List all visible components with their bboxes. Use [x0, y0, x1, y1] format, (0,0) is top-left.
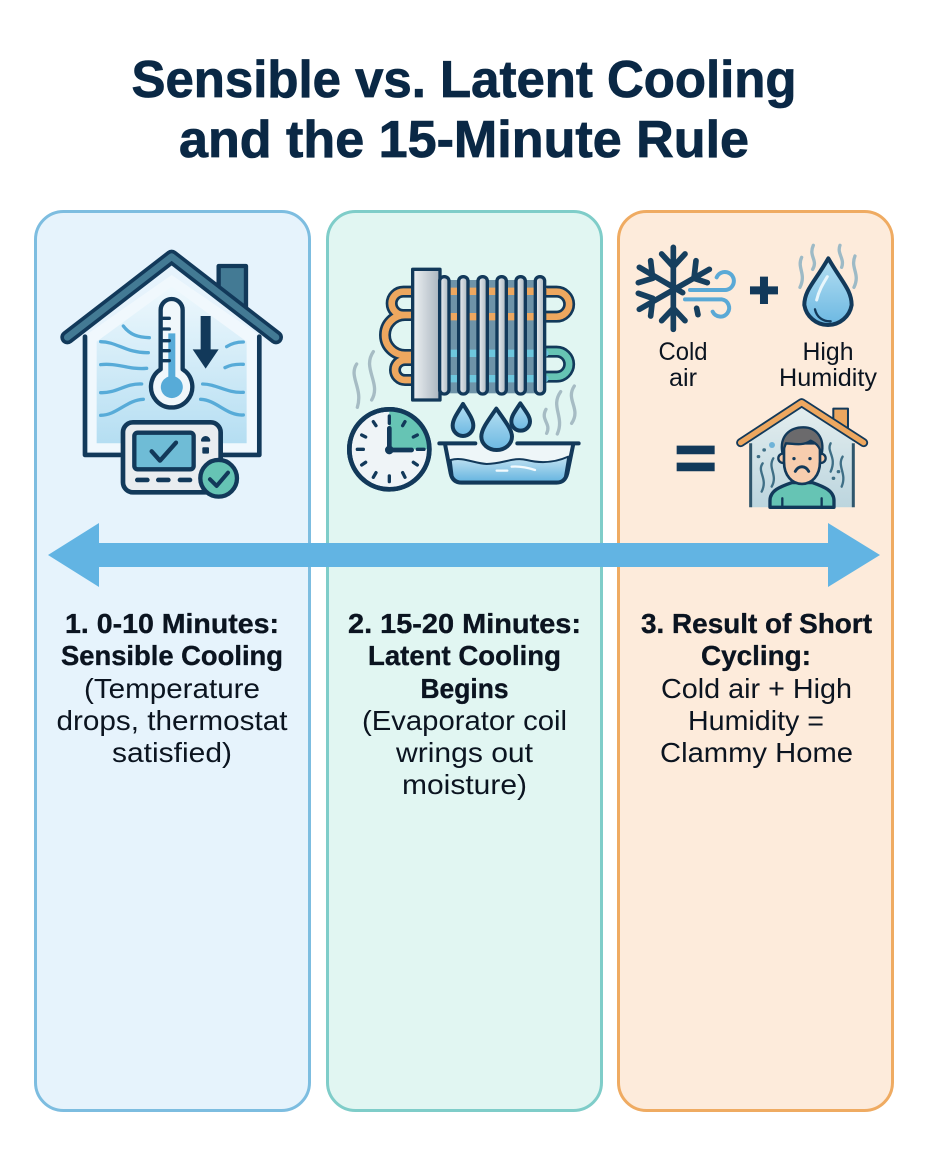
icon: coil pipes: [385, 280, 569, 393]
icon: house with thermometer and thermostat: [67, 257, 276, 497]
text: step 2: (Evaporator coil: [362, 705, 567, 736]
text: step 3: 3. Result of Short: [641, 608, 872, 639]
icon: wind: [685, 272, 734, 317]
text: step 1: satisfied): [112, 737, 232, 768]
icon: vapour left: [354, 352, 375, 407]
icon: coil fins: [413, 269, 545, 400]
label: high humidity: [779, 338, 877, 392]
icon: clock: [349, 409, 429, 489]
icon: humidity vapour: [800, 245, 856, 287]
text: step 3: Cycling:: [701, 640, 811, 671]
icon: thermostat: [123, 422, 221, 492]
icon: equals: [677, 450, 715, 467]
panel: sensible cooling: [36, 212, 310, 1110]
text: step 2: [348, 608, 581, 800]
icon: clammy house with person: [741, 403, 864, 507]
icon: chimney: [219, 266, 246, 310]
text: step 3: Clammy Home: [660, 737, 853, 768]
panel: short cycling result: [618, 212, 892, 1110]
label: high humidity: High: [802, 338, 854, 366]
text: step 2: wrings out: [395, 737, 533, 768]
icon: roof: [67, 257, 276, 337]
icon: down arrow: [193, 316, 219, 369]
title: Sensible vs. Latent Cooling: [132, 51, 796, 109]
text: step 2: 2. 15-20 Minutes:: [348, 608, 581, 639]
text: step 1: (Temperature: [84, 673, 260, 704]
icon: water drops: [453, 403, 530, 450]
icon: snowflake: [638, 247, 709, 329]
text: step 3: [641, 608, 872, 768]
label: cold air: air: [669, 364, 697, 392]
icon: air waves: [101, 326, 243, 415]
text: step 2: Begins: [420, 673, 508, 704]
icon: plus: [750, 277, 778, 304]
label: high humidity: Humidity: [779, 364, 877, 392]
label: cold air: [658, 338, 708, 392]
text: step 2: moisture): [402, 769, 527, 800]
text: step 1: drops, thermostat: [56, 705, 288, 736]
text: step 3: Humidity =: [688, 705, 824, 736]
panel: latent cooling: [328, 212, 602, 1110]
text: step 2: Latent Cooling: [368, 640, 561, 671]
icon: person: [770, 427, 834, 507]
icon: drain pan: [439, 443, 579, 483]
text: step 1: [56, 608, 288, 768]
arrow: timeline: [48, 523, 880, 587]
icon: moisture squiggles: [758, 443, 843, 492]
icon: vapour right: [544, 386, 575, 434]
title: [132, 51, 796, 169]
icon: evaporator coil, clock and drain pan: [349, 269, 579, 489]
icon: cold air, humidity and clammy home equation: [638, 245, 864, 507]
text: step 1: 1. 0-10 Minutes:: [65, 608, 279, 639]
icon: humidity drop: [804, 258, 852, 325]
label: cold air: Cold: [658, 338, 708, 366]
icon: thermometer: [151, 299, 192, 407]
icon: orange roof: [833, 409, 848, 432]
text: step 3: Cold air + High: [661, 673, 852, 704]
icon: check badge: [200, 460, 237, 497]
text: step 1: Sensible Cooling: [61, 640, 283, 671]
title: and the 15-Minute Rule: [179, 111, 749, 169]
